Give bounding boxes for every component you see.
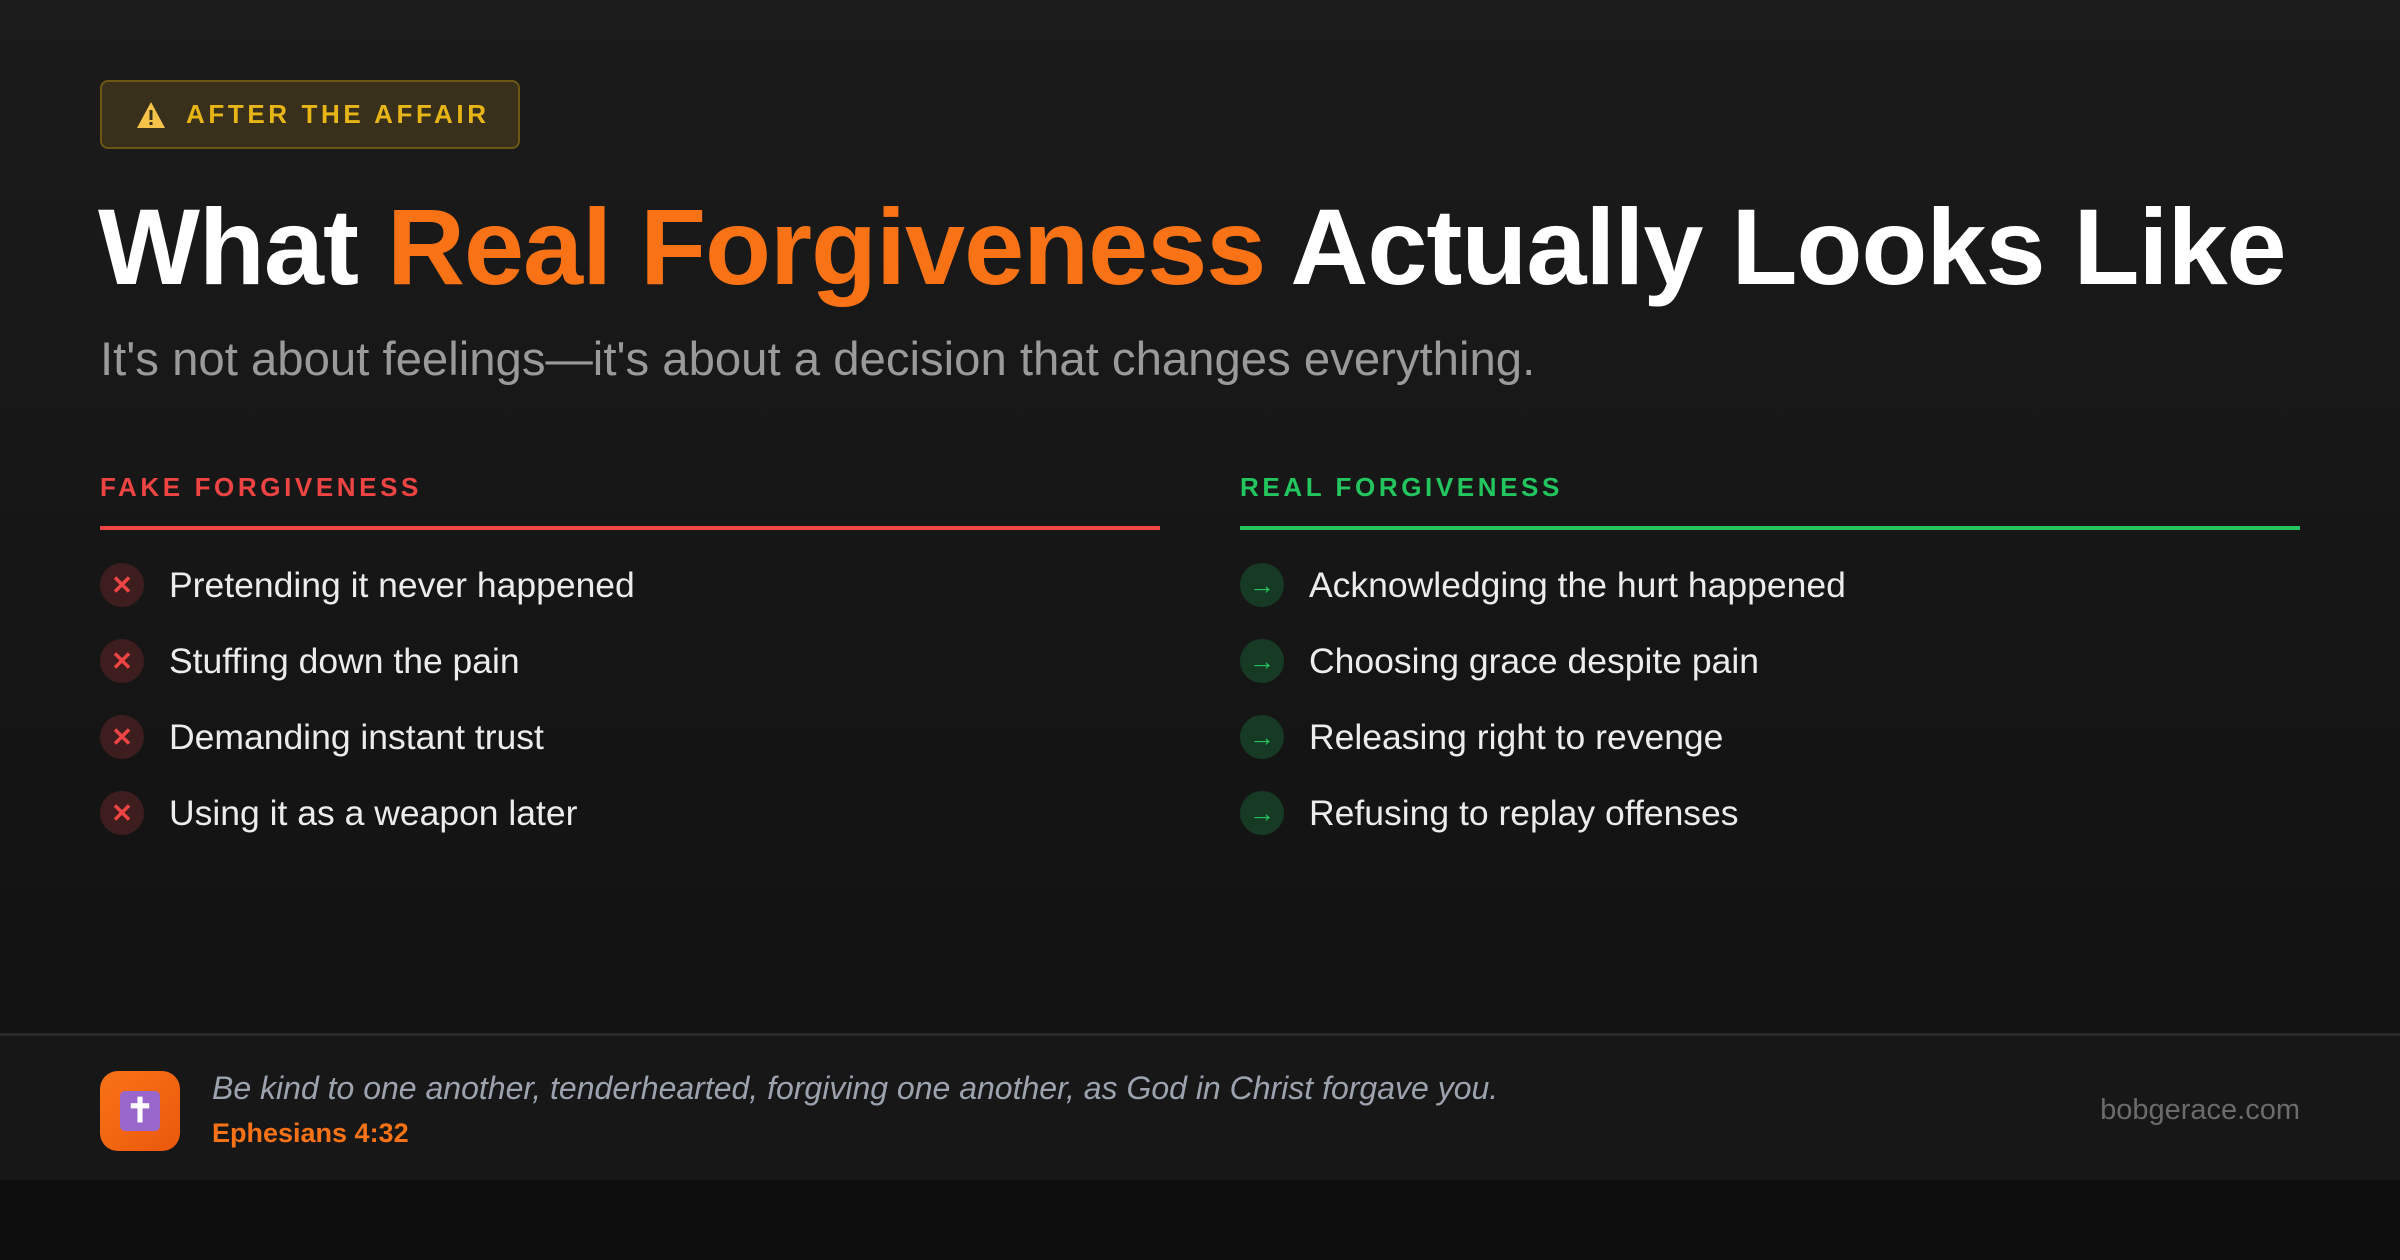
list: real items: Releasing right to revenge <box>1309 716 1723 756</box>
verse reference: Ephesians 4:32 <box>212 1118 409 1148</box>
heading: real: REAL FORGIVENESS <box>1240 472 1563 502</box>
title: What Real Forgiveness Actually Looks Like <box>98 186 2286 307</box>
list: fake items: Using it as a weapon later <box>169 792 577 832</box>
list: fake items <box>100 563 635 835</box>
badge: after the affair <box>100 80 520 149</box>
list: fake items: Stuffing down the pain <box>169 640 520 680</box>
list: real items: → <box>1249 722 1275 752</box>
list: real items: Choosing grace despite pain <box>1309 640 1759 680</box>
list: fake items: ✕ <box>111 570 133 600</box>
panel: fake forgiveness <box>100 472 1160 835</box>
subtitle: It's not about feelings—it's about a decision that changes everything. <box>100 333 1535 386</box>
list: fake items: ✕ <box>111 798 133 828</box>
list: fake items: Demanding instant trust <box>169 716 544 756</box>
list: real items <box>1240 563 1846 835</box>
list: fake items: ✕ <box>111 722 133 752</box>
list: fake items: Pretending it never happened <box>169 564 635 604</box>
list: real items: → <box>1249 798 1275 828</box>
list: real items: Acknowledging the hurt happened <box>1309 564 1846 604</box>
badge: after the affair: AFTER THE AFFAIR <box>186 99 490 129</box>
footer <box>0 1033 2400 1180</box>
icon: cross: ✝ <box>126 1092 154 1130</box>
list: fake items: ✕ <box>111 646 133 676</box>
website: bobgerace.com <box>2100 1094 2300 1126</box>
panel: real forgiveness <box>1240 472 2300 835</box>
icon: cross <box>100 1071 180 1151</box>
heading: fake: FAKE FORGIVENESS <box>100 472 422 502</box>
list: real items: → <box>1249 570 1275 600</box>
verse text: Be kind to one another, tenderhearted, forgiving one another, as God in Christ forgave you. <box>212 1070 1498 1106</box>
list: real items: → <box>1249 646 1275 676</box>
list: real items: Refusing to replay offenses <box>1309 792 1739 832</box>
